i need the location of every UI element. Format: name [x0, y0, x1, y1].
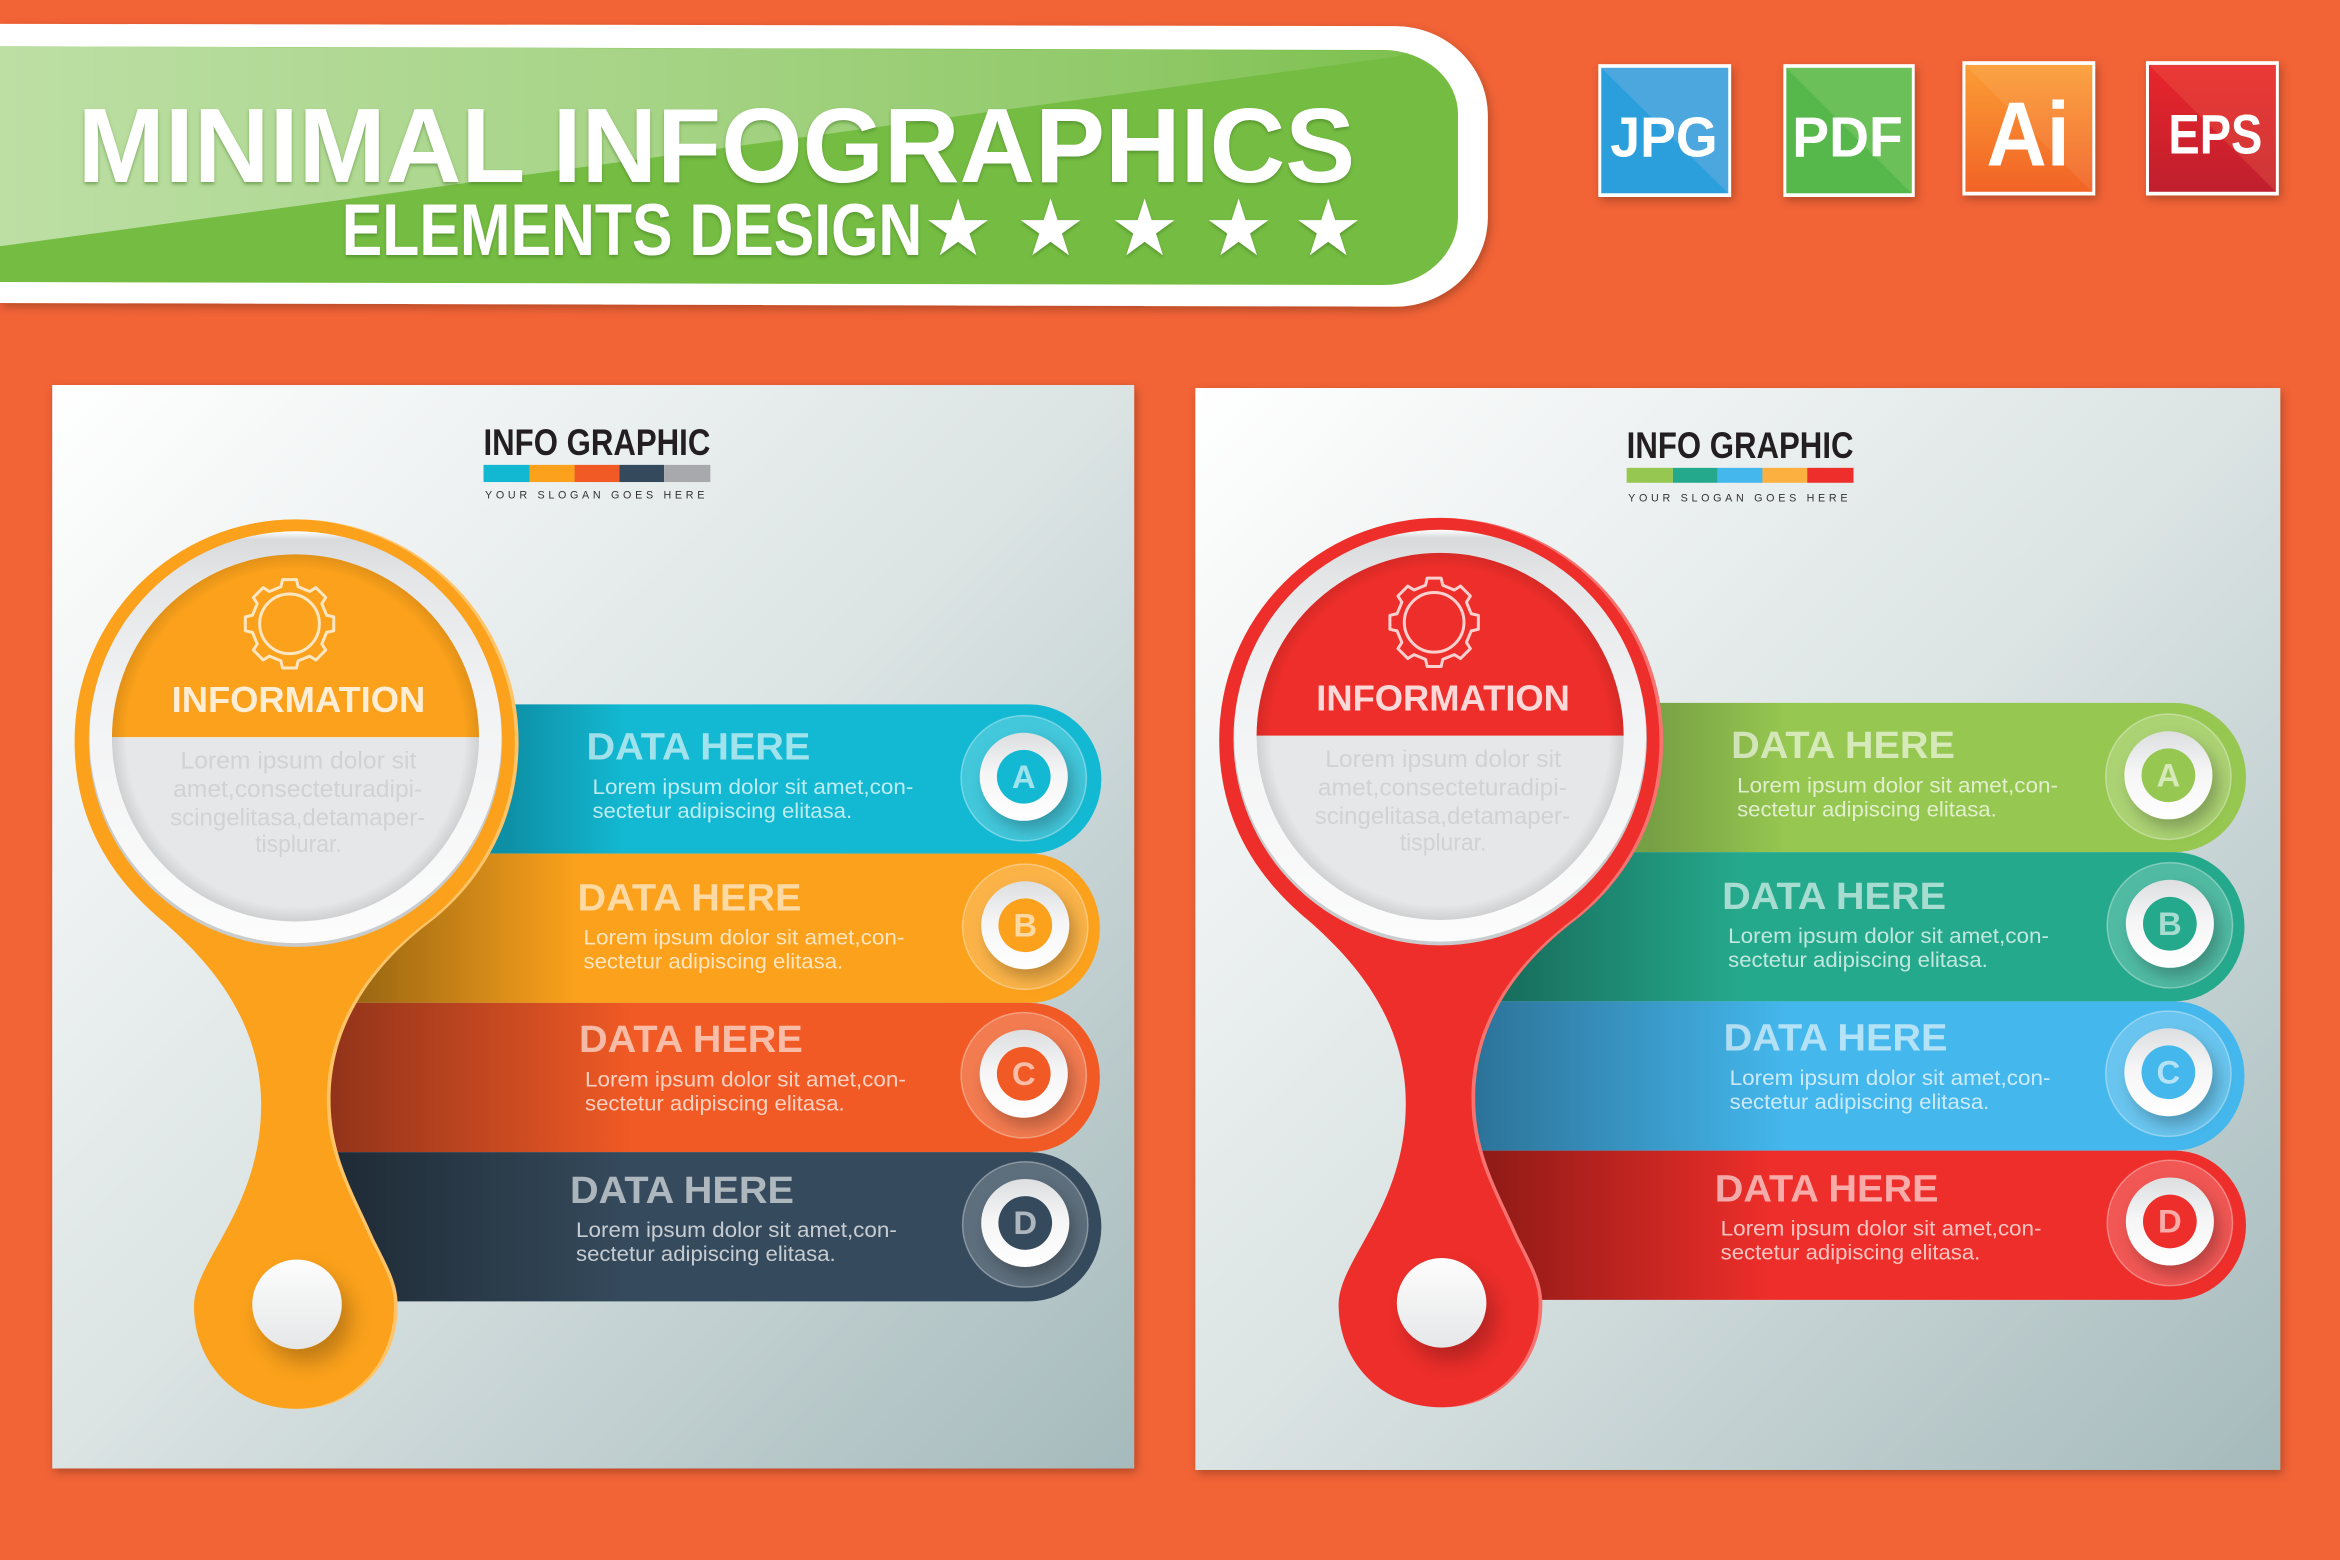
- band D: D: [2158, 1203, 2182, 1240]
- circle body text: amet,consecteturadipi-: [173, 776, 422, 803]
- logo: info graphic: INFO GRAPHIC: [484, 421, 710, 463]
- band C: sectetur adipiscing elitasa.: [585, 1090, 845, 1115]
- icon: Ai file: [1962, 61, 2095, 195]
- band A: [1592, 703, 2246, 852]
- band C: C: [1012, 1055, 1036, 1092]
- logo: info graphic: YOUR SLOGAN GOES HERE: [485, 489, 704, 501]
- logo: info graphic: [484, 421, 710, 501]
- magnifier shape: [75, 519, 519, 1409]
- circle body text: [1315, 746, 1570, 857]
- bulb button: [1397, 1258, 1486, 1348]
- logo: info graphic: INFO GRAPHIC: [1627, 424, 1853, 466]
- icon: PDF file: PDF: [1792, 107, 1903, 170]
- circle body text: Lorem ipsum dolor sit: [181, 748, 417, 775]
- icon: PDF file: [1783, 64, 1915, 197]
- graphic group: [1219, 518, 2246, 1407]
- band D: [321, 1152, 1101, 1301]
- heading: information: INFORMATION: [1316, 677, 1570, 718]
- info circle: [104, 548, 487, 928]
- circle body text: tisplurar.: [255, 831, 342, 858]
- band A: A: [2157, 756, 2180, 793]
- icon: EPS file: EPS: [2168, 104, 2262, 166]
- panel background: [52, 385, 1134, 1468]
- band B: DATA HERE: [1722, 876, 1946, 918]
- panel: orange infographic: [52, 385, 1134, 1468]
- band A: [448, 704, 1101, 854]
- band A: Lorem ipsum dolor sit amet,con-: [1737, 772, 2058, 797]
- band B: sectetur adipiscing elitasa.: [1728, 947, 1988, 972]
- band D: D: [1013, 1204, 1037, 1241]
- band A: sectetur adipiscing elitasa.: [1737, 796, 1997, 821]
- band D: Lorem ipsum dolor sit amet,con-: [576, 1217, 897, 1242]
- logo: info graphic: YOUR SLOGAN GOES HERE: [1628, 492, 1848, 504]
- band A: Lorem ipsum dolor sit amet,con-: [592, 774, 913, 799]
- panel: red infographic: [1195, 388, 2280, 1470]
- icon: Ai file: Ai: [1986, 85, 2070, 186]
- band B: DATA HERE: [578, 877, 801, 919]
- band B: [336, 854, 1100, 1003]
- icon: JPG file: [1598, 64, 1731, 197]
- band B: Lorem ipsum dolor sit amet,con-: [1728, 923, 2049, 948]
- icon: gear: [1390, 578, 1478, 667]
- circle body text: [170, 748, 425, 858]
- band C: sectetur adipiscing elitasa.: [1730, 1089, 1989, 1114]
- band B: sectetur adipiscing elitasa.: [584, 949, 843, 974]
- rating stars: [928, 198, 1358, 255]
- band D: sectetur adipiscing elitasa.: [576, 1241, 836, 1266]
- band D: sectetur adipiscing elitasa.: [1721, 1240, 1980, 1265]
- band C: [1465, 1001, 2244, 1151]
- band A: DATA HERE: [1731, 725, 1955, 767]
- band C: Lorem ipsum dolor sit amet,con-: [585, 1066, 906, 1091]
- circle body text: scingelitasa,detamaper-: [170, 804, 425, 831]
- band D: DATA HERE: [570, 1170, 794, 1212]
- band D: [1465, 1151, 2246, 1300]
- banner white outline: [0, 24, 1488, 307]
- icon: gear: [245, 580, 334, 668]
- band C: DATA HERE: [1724, 1018, 1948, 1060]
- bulb button: [252, 1260, 342, 1349]
- circle body text: tisplurar.: [1400, 830, 1486, 857]
- circle body text: scingelitasa,detamaper-: [1315, 803, 1570, 830]
- icon: JPG file: JPG: [1610, 107, 1718, 170]
- icon: EPS file: [2146, 61, 2279, 195]
- band B: B: [2158, 905, 2182, 942]
- banner: [0, 24, 1488, 307]
- band B: [1480, 852, 2244, 1001]
- band B: B: [1013, 906, 1037, 943]
- circle body text: Lorem ipsum dolor sit: [1325, 746, 1561, 773]
- white ring: [1233, 532, 1647, 945]
- subtitle: ELEMENTS DESIGN: [342, 190, 922, 271]
- band A: sectetur adipiscing elitasa.: [592, 798, 852, 823]
- band C: DATA HERE: [579, 1019, 803, 1061]
- circle body text: amet,consecteturadipi-: [1318, 774, 1567, 801]
- magnifier shape: [1219, 518, 1663, 1407]
- title: MINIMAL INFOGRAPHICS: [78, 87, 1355, 205]
- logo: info graphic: [1627, 424, 1853, 504]
- band C: [321, 1003, 1100, 1152]
- band C: C: [2157, 1053, 2180, 1090]
- banner gloss: [0, 46, 1418, 246]
- band B: Lorem ipsum dolor sit amet,con-: [584, 925, 904, 950]
- info circle: [1249, 546, 1631, 927]
- band A: A: [1012, 758, 1036, 795]
- white ring: [89, 534, 502, 947]
- heading: information: INFORMATION: [172, 679, 425, 720]
- panel background: [1195, 388, 2280, 1470]
- band D: DATA HERE: [1715, 1168, 1939, 1210]
- band A: DATA HERE: [586, 727, 810, 769]
- band D: Lorem ipsum dolor sit amet,con-: [1721, 1216, 2042, 1241]
- banner green plate: [0, 46, 1458, 285]
- band C: Lorem ipsum dolor sit amet,con-: [1730, 1065, 2050, 1090]
